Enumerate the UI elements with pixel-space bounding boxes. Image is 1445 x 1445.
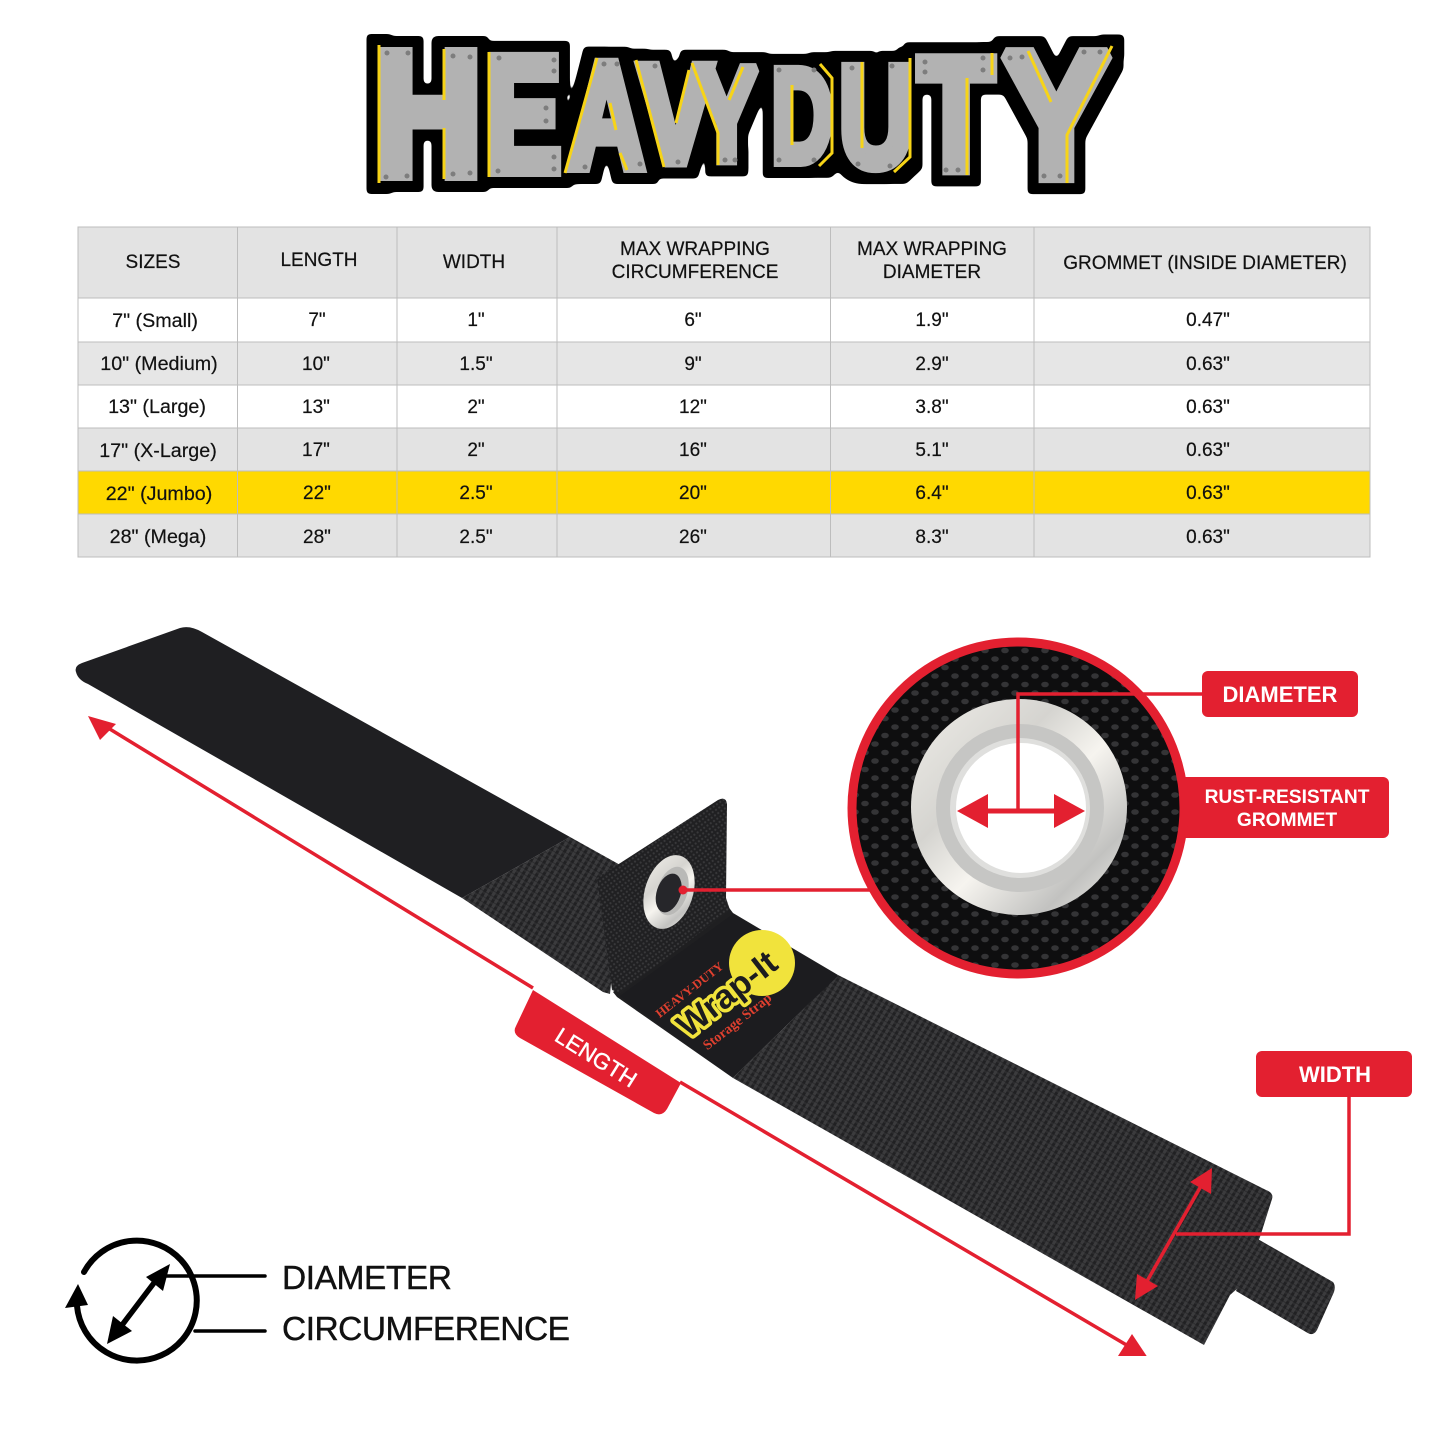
row: 17 inch x-large: 17" <box>302 440 330 461</box>
table row backgrounds <box>78 298 1370 557</box>
row: 17 inch x-large: 17" (X-Large) <box>99 440 217 462</box>
woven section behind flap <box>462 837 622 994</box>
row: 17 inch x-large: 16" <box>679 440 707 461</box>
grommet flap <box>597 799 730 993</box>
strap photo illustration <box>76 627 1335 1345</box>
row: 13 inch large: 13" <box>302 397 330 418</box>
length arrow <box>88 716 1148 1358</box>
row: 10 inch medium: 10" <box>302 354 330 375</box>
table headers: MAX WRAPPING <box>620 239 770 260</box>
title: Heavy Duty: H <box>376 17 481 212</box>
table headers: LENGTH <box>280 250 358 271</box>
diameter label and arrow <box>957 671 1358 828</box>
small grommet <box>634 848 704 936</box>
label text: Heavy-Duty: HEAVY-DUTY <box>653 959 726 1021</box>
row: 7 inch small: 7" (Small) <box>112 310 198 332</box>
row: 17 inch x-large <box>99 440 1230 462</box>
title: Heavy Duty: D <box>771 41 833 190</box>
table header row background <box>78 227 1370 298</box>
row: 7 inch small: 0.47" <box>1186 310 1230 331</box>
row: 22 inch jumbo highlighted: 22" (Jumbo) <box>106 483 212 505</box>
table headers: GROMMET (INSIDE DIAMETER) <box>1063 253 1347 274</box>
title: Heavy Duty: E <box>486 23 561 205</box>
length label: LENGTH <box>551 1023 641 1092</box>
legend: diameter and circumference: CIRCUMFERENCE <box>282 1311 570 1348</box>
table headers <box>126 239 1347 283</box>
row: 28 inch mega: 8.3" <box>915 527 949 548</box>
title: Heavy Duty: Y <box>1003 15 1110 214</box>
row: 22 inch jumbo highlighted: 6.4" <box>915 483 949 504</box>
title: Heavy Duty: V <box>639 37 712 192</box>
row: 7 inch small: 1.9" <box>915 310 949 331</box>
rust-resistant grommet label: RUST-RESISTANT <box>1205 787 1370 808</box>
row: 10 inch medium: 1.5" <box>459 354 493 375</box>
diameter label and arrow: DIAMETER <box>1223 682 1338 707</box>
width label and arrow: WIDTH <box>1299 1062 1371 1087</box>
row: 10 inch medium: 0.63" <box>1186 354 1230 375</box>
brand label <box>620 914 838 1077</box>
row: 28 inch mega: 2.5" <box>459 527 493 548</box>
row: 17 inch x-large: 5.1" <box>915 440 949 461</box>
size table <box>78 227 1370 557</box>
row: 17 inch x-large: 0.63" <box>1186 440 1230 461</box>
icon: circle with arrows <box>65 1241 265 1361</box>
rust-resistant grommet label <box>1160 777 1389 838</box>
row: 28 inch mega: 28" <box>303 527 331 548</box>
row: 10 inch medium <box>100 353 1230 375</box>
row: 28 inch mega: 0.63" <box>1186 527 1230 548</box>
table headers: WIDTH <box>443 252 505 273</box>
row: 22 inch jumbo highlighted: 2.5" <box>459 483 493 504</box>
row: 13 inch large: 0.63" <box>1186 397 1230 418</box>
row: 28 inch mega <box>110 526 1230 548</box>
stitched fold <box>613 905 838 1078</box>
label text: Wrap-It: Wrap-It <box>670 944 785 1045</box>
row: 7 inch small <box>112 310 1230 332</box>
title: Heavy Duty: T <box>919 26 994 204</box>
table headers: DIAMETER <box>883 262 981 283</box>
row: 13 inch large <box>108 396 1230 418</box>
title: Heavy Duty: U <box>839 37 914 197</box>
title: Heavy Duty: Y <box>696 41 758 189</box>
row: 13 inch large: 13" (Large) <box>108 396 206 418</box>
row: 13 inch large: 12" <box>679 397 707 418</box>
connector from small grommet to zoom circle <box>678 886 875 894</box>
legend: diameter and circumference <box>65 1241 570 1361</box>
title: Heavy Duty: A <box>569 32 644 200</box>
large grommet <box>911 699 1127 915</box>
table headers: SIZES <box>126 252 180 273</box>
row: 28 inch mega: 28" (Mega) <box>110 526 206 548</box>
legend text: DIAMETER <box>282 1260 452 1297</box>
row: 13 inch large: 3.8" <box>915 397 949 418</box>
row: 10 inch medium: 2.9" <box>915 354 949 375</box>
row: 10 inch medium: 10" (Medium) <box>100 353 218 375</box>
length label <box>515 990 681 1114</box>
lower webbing section <box>733 975 1272 1345</box>
row: 22 inch jumbo highlighted: 0.63" <box>1186 483 1230 504</box>
row: 22 inch jumbo highlighted: 20" <box>679 483 707 504</box>
row: 28 inch mega: 26" <box>679 527 707 548</box>
row: 13 inch large: 2" <box>467 397 485 418</box>
row: 10 inch medium: 9" <box>684 354 702 375</box>
row: 7 inch small: 7" <box>308 310 326 331</box>
width label and arrow <box>1135 1051 1412 1300</box>
label yellow circle <box>729 930 795 996</box>
table headers: MAX WRAPPING <box>857 239 1007 260</box>
row: 7 inch small: 1" <box>467 310 485 331</box>
row: 17 inch x-large: 2" <box>467 440 485 461</box>
table headers: CIRCUMFERENCE <box>612 262 778 283</box>
row: 22 inch jumbo highlighted: 22" <box>303 483 331 504</box>
velcro section <box>76 627 570 898</box>
title: Heavy Duty <box>376 15 1112 214</box>
lower webbing tab <box>1236 1238 1335 1334</box>
row: 7 inch small: 6" <box>684 310 702 331</box>
zoom circle <box>852 642 1184 974</box>
rust-resistant grommet label: GROMMET <box>1237 810 1337 831</box>
label text: Storage Strap: Storage Strap <box>701 991 775 1054</box>
row: 22 inch jumbo highlighted <box>106 483 1230 505</box>
